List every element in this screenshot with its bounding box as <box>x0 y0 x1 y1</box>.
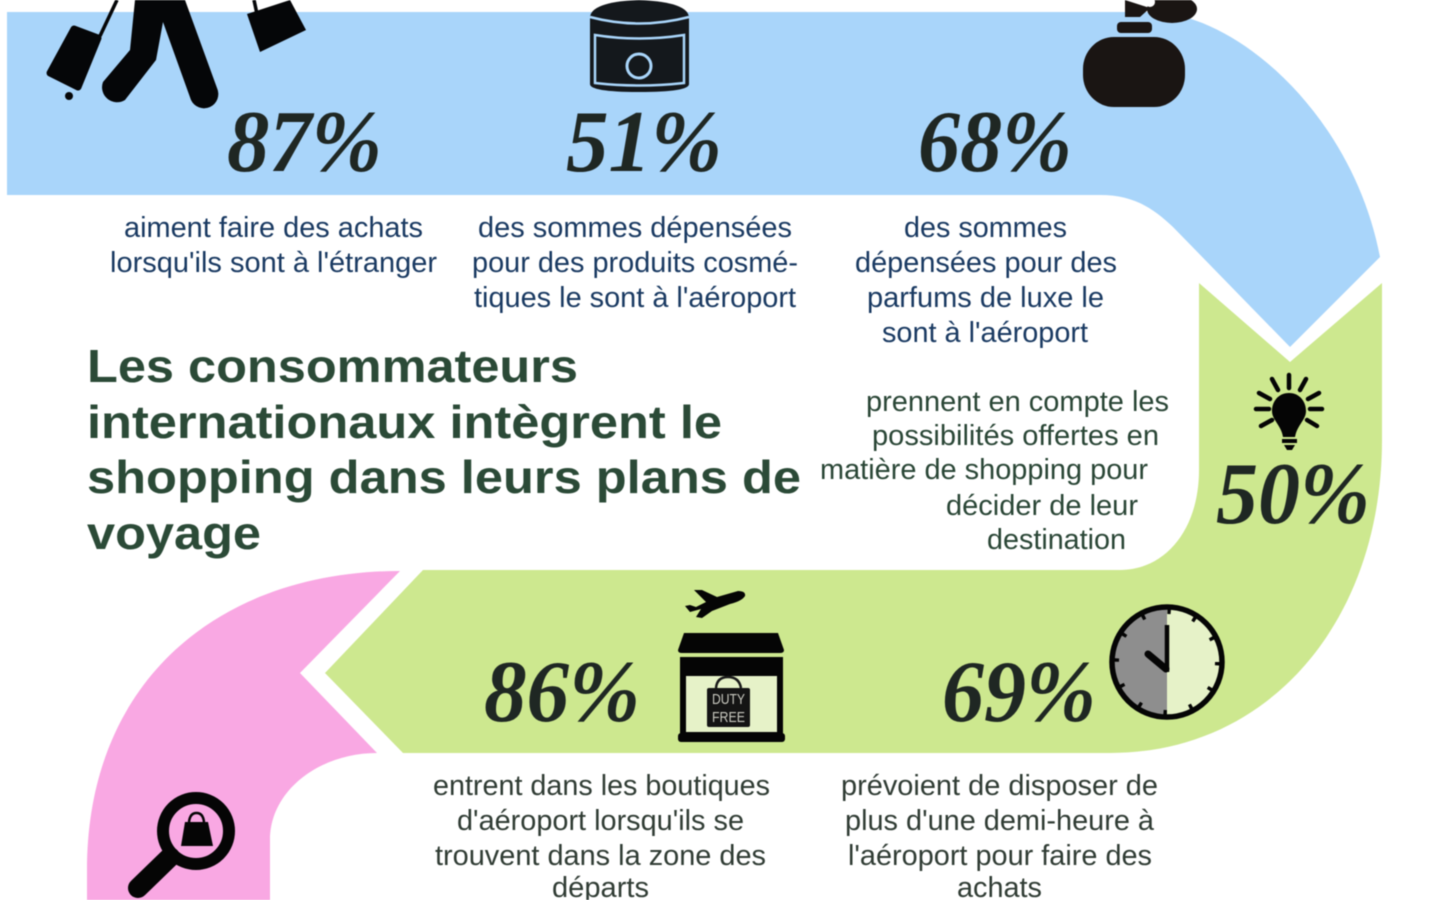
text: 86% caption: trouvent dans la zone des <box>435 840 766 872</box>
text: 86% caption: entrent dans les boutiques <box>433 770 770 802</box>
text: 86% caption <box>433 770 770 900</box>
text: 69% caption <box>841 770 1158 900</box>
text: 50% caption: matière de shopping pour <box>820 454 1149 486</box>
text: 51% caption <box>472 212 798 314</box>
text: 69% caption: l'aéroport pour faire des <box>848 840 1152 872</box>
icon: clock <box>1112 607 1222 717</box>
icon: traveler with luggage <box>50 0 306 108</box>
title: Les consommateurs <box>87 340 578 392</box>
stat: 87%: 87% <box>227 94 382 191</box>
title <box>87 340 801 559</box>
text: 50% caption <box>820 386 1169 556</box>
title: internationaux intègrent le <box>87 396 722 448</box>
text: 69% caption: prévoient de disposer de <box>841 770 1158 802</box>
text: 86% caption: d'aéroport lorsqu'ils se <box>457 805 744 837</box>
title: shopping dans leurs plans de <box>87 451 801 503</box>
icon: magnifying glass with bag <box>138 798 229 888</box>
text: 50% caption: possibilités offertes en <box>872 420 1159 452</box>
text: 68% caption: des sommes <box>904 212 1067 244</box>
icon: perfume bottle <box>1083 0 1197 107</box>
text: 68% caption: sont à l'aéroport <box>882 317 1088 349</box>
panel: blue ribbon <box>7 12 1380 347</box>
icon: cosmetics jar <box>590 0 689 92</box>
text: 50% caption: prennent en compte les <box>866 386 1169 418</box>
icon: duty free shop <box>678 633 785 742</box>
stat: 69%: 69% <box>942 644 1096 741</box>
stat: 68%: 68% <box>918 94 1072 191</box>
text: 51% caption: pour des produits cosmé- <box>472 247 798 279</box>
text: 69% caption: plus d'une demi-heure à <box>845 805 1154 837</box>
panel: pink ribbon <box>87 571 400 900</box>
icon: light bulb <box>1256 375 1322 450</box>
icon: duty free shop: FREE <box>712 709 745 726</box>
text: 68% caption <box>855 212 1117 349</box>
stat: 86%: 86% <box>484 644 640 741</box>
text: 68% caption: dépensées pour des <box>855 247 1117 279</box>
title: voyage <box>87 507 261 559</box>
text: 50% caption: décider de leur <box>946 490 1139 522</box>
text: 51% caption: des sommes dépensées <box>478 212 792 244</box>
text: 87% caption: aiment faire des achats <box>124 212 423 244</box>
text: 50% caption: destination <box>987 524 1126 556</box>
text: 87% caption: lorsqu'ils sont à l'étranger <box>110 247 438 279</box>
icon: duty free shop: DUTY <box>712 691 745 708</box>
text: 87% caption <box>110 212 438 279</box>
panel: green ribbon <box>325 283 1382 753</box>
stat: 51%: 51% <box>566 94 722 191</box>
text: 68% caption: parfums de luxe le <box>867 282 1104 314</box>
icon: airplane <box>685 590 745 618</box>
stat: 50%: 50% <box>1216 446 1370 543</box>
text: 51% caption: tiques le sont à l'aéroport <box>474 282 796 314</box>
